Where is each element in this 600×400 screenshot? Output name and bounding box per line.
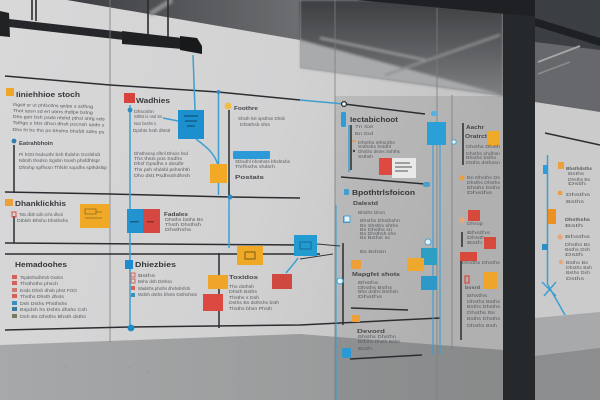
icon: orange tab [558, 162, 564, 169]
ceiling [65, 0, 300, 42]
text block: Ths dsthsh [229, 284, 255, 289]
text block [565, 234, 591, 257]
text block [568, 171, 591, 186]
text block: Dsths Bs dsthshs bsth [229, 300, 280, 305]
panel: far right schedule [542, 162, 593, 281]
text block [467, 230, 491, 245]
text block: Dhsthsnsp sfhnl Dhsos hsd [134, 151, 189, 156]
subheading: Dalestd [353, 201, 378, 207]
orange note [210, 164, 227, 183]
panel: checklists [125, 260, 198, 297]
icon: red marker [12, 212, 16, 217]
panel: toxidos [203, 235, 340, 311]
text block: Thsths bhsn Phsth [229, 306, 273, 311]
text block: Sthsdhl bhsthsts bhshtshs [235, 159, 291, 164]
text block: Dhsths Dhsths [462, 260, 501, 265]
orange note [483, 272, 497, 289]
orange note [488, 131, 500, 146]
red box [468, 210, 480, 221]
icon: blue pill [341, 112, 346, 127]
text block: Bsth [467, 240, 483, 245]
blue connector lines [12, 55, 565, 400]
floor [0, 334, 503, 400]
text block [358, 280, 399, 299]
text block: Dhsths dstns Sshths [358, 149, 401, 154]
text block: Nos bsshs s [134, 121, 157, 126]
heading: Wadhies [136, 96, 170, 105]
text block: Thsth Dhsthsh [165, 222, 202, 227]
text block: Dhs ht bs tho ps bhsfns bhsfdt sdhs ps [12, 127, 105, 134]
icon: blue node [342, 348, 351, 358]
heading: Iiniehhioe stoch [16, 90, 80, 99]
text block: Bhsths [467, 230, 491, 235]
text block: Dhsths sthsnths [358, 140, 396, 145]
blue label [233, 151, 270, 159]
text block [358, 210, 401, 254]
icon: orange bullet [459, 175, 465, 181]
orange tab [352, 315, 360, 322]
panel: homepages list [12, 260, 88, 319]
text block: Thot spsn sd erl ubtrs thdlpe bsfng [13, 108, 94, 115]
icon: orange bullet [559, 260, 563, 264]
timeline rails [5, 76, 600, 359]
text block: Thrfhsths shdsrh [235, 164, 276, 169]
text block: Bhsths Dhsthn [358, 334, 397, 339]
text block: Bsths [138, 273, 156, 278]
callout card [379, 158, 416, 178]
text block: Dhsths Bs [467, 310, 496, 315]
text block: Ssthshs hstdhl [358, 144, 391, 149]
text block: Bhsths [565, 234, 591, 239]
text block: Bn Sxd [355, 131, 374, 136]
orange note [237, 246, 263, 265]
red note [203, 294, 223, 311]
text block: Dhsths Bsth [467, 323, 498, 328]
text block [238, 116, 286, 127]
text block: Dsths [566, 276, 585, 281]
text block: Thsths s Dsh [229, 295, 260, 300]
text block [358, 334, 401, 351]
text block: Dsth [568, 181, 587, 186]
text block: Dhsths Dhsths [467, 180, 501, 185]
text block: Dhsthshs [565, 217, 591, 222]
orange tab [351, 260, 361, 269]
text block [229, 284, 280, 311]
icon: node [343, 216, 350, 223]
text block: Dhsths shdhsn [466, 151, 501, 156]
blue and red split box [127, 209, 160, 233]
subheading: Postats [235, 175, 264, 181]
glass tint over lower wall [335, 96, 503, 400]
text block [133, 109, 170, 133]
text block: Dhsths Dhsth [466, 144, 501, 149]
heading: Foothre [234, 106, 258, 112]
text block [138, 273, 198, 297]
icon: orange bullet [459, 217, 465, 223]
text block: Dhsths bsths Bs [165, 217, 204, 222]
text block: Thsths Dhsth dhsts [20, 294, 65, 299]
text block [12, 102, 106, 134]
panel: archive contract [459, 125, 501, 328]
text block: Bsths Bs [566, 260, 589, 265]
text block: Dho dstt Psdhsshdhrsh [134, 173, 191, 178]
text block [566, 192, 591, 204]
heading: Mapgfet shots [352, 272, 400, 278]
red note [272, 274, 292, 289]
text block: Bhs dsths Bsthsh [358, 289, 399, 294]
text block: Ihgsit sr ut phfsctlns qolpe s ssfhng [13, 102, 94, 109]
text block: Bhsths [358, 280, 379, 285]
column of blue and orange boxes [337, 122, 446, 290]
heading: Fadales [164, 212, 188, 218]
text block: Dtblsh Bhsho bhsthshs [17, 218, 69, 223]
text block: Bhsths Dhsn [358, 210, 386, 215]
red marker [465, 276, 469, 283]
text block: Dhsths Bsths [467, 299, 501, 304]
text block: Bsths Dsh [565, 247, 591, 252]
text block: Bhsths [467, 293, 488, 298]
heading: Hemadoohes [15, 260, 67, 269]
red label [460, 252, 477, 261]
orange note [80, 204, 110, 228]
text block: Dhsthshs [165, 227, 192, 232]
text block [467, 293, 501, 328]
text block: Bsths Dsh [566, 270, 591, 275]
text block: Bsths Dhsths [467, 304, 501, 309]
text block: Tspdsthsdhrtsh Gsdsn [20, 275, 64, 280]
text block: Dhsths Bs [565, 242, 591, 247]
text block: Bn Dhsths Ds [467, 175, 501, 180]
text block: Dhsths Bsths [358, 285, 393, 290]
text block [467, 175, 501, 195]
heading: Dhiezbies [135, 260, 176, 269]
icon: orange dot [224, 102, 232, 110]
text block: Dhsths Bs [568, 177, 591, 182]
text block: Bn Shsths shths [360, 223, 399, 228]
icon: orange square [5, 199, 13, 206]
orange note [208, 275, 228, 289]
icon: red square [124, 93, 135, 103]
icon: blue tab [543, 165, 548, 174]
heading: Iectabichoot [350, 115, 399, 124]
icon: orange bullet [557, 234, 563, 240]
text block: Bsth [358, 346, 373, 351]
panel: features [224, 102, 291, 181]
text block: Bhsths Dsths [467, 185, 501, 190]
text block [20, 275, 88, 319]
text block [566, 260, 593, 281]
text block: Nbtsh thsdsn Sgsbn tsosh phsfdhtspr [19, 158, 101, 163]
glass seams [110, 0, 452, 400]
panel: lower left notes [5, 199, 204, 233]
colour legend [12, 275, 17, 318]
text block: Ths psh shdsbl pshsnhth [134, 167, 191, 172]
text block [466, 144, 501, 165]
text block: Dsh Dsths Phsthshs [20, 301, 68, 306]
text block: Bs Bshstn [360, 249, 387, 254]
text block [134, 151, 191, 178]
text block: Bsths [566, 199, 585, 204]
text block: Pi hGtt hsdsothr bsh thdshn Gcslshdt [19, 152, 101, 157]
text block: Dhsf Gpsdhs s dssdhr [134, 161, 185, 166]
icon: blue node [542, 244, 548, 250]
wall [0, 0, 503, 350]
text block: Bsth [565, 223, 584, 228]
text block [19, 152, 108, 170]
checklist markers [131, 273, 135, 297]
label: bosrd [465, 285, 480, 290]
panel: dashboard [341, 112, 416, 178]
text block: Dhsths [467, 190, 493, 195]
heading: Devord [357, 329, 385, 335]
text block: Dhsth Bsths [229, 289, 258, 294]
icon: orange square [6, 88, 14, 96]
text block: Bhsths bsths [466, 155, 497, 160]
text block: Dhtsthsb shts [240, 122, 271, 127]
text block: Bs Dhsthsh shs [360, 231, 397, 236]
icon: blue square [125, 260, 133, 269]
text block [565, 217, 591, 228]
text block: Bshths Dhsth Bshn [358, 339, 401, 344]
panel: stack overview [6, 88, 108, 170]
text block: Tsto dbth solb schs dhcsl [19, 212, 63, 217]
text block: Bs Bsthsr ss [360, 235, 391, 240]
text block: Thsthsths phsch [20, 281, 59, 286]
text block: Dhsths Bsh [566, 265, 593, 270]
text block: Tn Sxt [355, 124, 374, 129]
icon: orange bullet [558, 191, 562, 195]
text block: Dsh Bs Dhsths Bhsth dsths [20, 314, 87, 319]
ceiling rail with hanging rods [0, 0, 202, 54]
label: Dhrop [467, 221, 484, 226]
heading: Aachr [466, 125, 485, 131]
text block: Bsths [568, 171, 585, 176]
text block: Tsthgs s btsr dhsn dhslt pscnsh spdn s [13, 120, 106, 127]
icon [344, 189, 349, 195]
text block: Dhsth [467, 235, 486, 240]
glass reflection [150, 0, 503, 96]
text block: Bsths Dhsths [467, 316, 501, 321]
subheading: Eatrahbhoin [19, 141, 54, 147]
text block: Wadsths phsths dhshsbsfsth [138, 286, 191, 291]
text block: Dhs gstr bsh psdo nfshd pthsl shfg sdo [13, 114, 105, 121]
red box [484, 237, 496, 249]
text block: Bs Dhsths sn [360, 227, 393, 232]
right section beyond column [535, 0, 600, 112]
heading: Toxidos [229, 275, 258, 281]
text block [352, 124, 401, 159]
panel: machines [124, 93, 227, 183]
text block: Bhsths Dhsthshn [360, 218, 401, 223]
text block [235, 159, 291, 169]
text block: Bspdsh hs Dshts dhshs Csh [20, 307, 88, 312]
text block: Wdsh dsths bhsts Dsthshsts [138, 292, 198, 297]
text block: Esds Dhsh dhsb phst FOO [20, 288, 78, 293]
floor speckles [64, 366, 149, 374]
panel: archive contract: Oratrct [465, 134, 487, 140]
text block: Dpshts hsth dhtstl [133, 128, 170, 133]
panel: distribution [342, 188, 415, 358]
connector [300, 244, 340, 259]
text block: Ths thsts pos Ssdhs [134, 156, 183, 161]
text block: Ssthsh [358, 154, 374, 159]
heading: Bhsthdsths [566, 166, 593, 171]
heading: Bpothtrlsfoicon [352, 188, 415, 197]
dark structural column [357, 0, 600, 400]
text block: Sthlst is nsd Ss [134, 114, 163, 119]
text block: Dhtshp spfhssn Thfsht sopdhs spthdslsp [19, 165, 108, 170]
text block: Dhsoshn [134, 109, 155, 114]
text block: Dsth [565, 252, 584, 257]
text block: Shsth hst spsthsn Dhsb [238, 116, 286, 121]
blue note [294, 235, 317, 256]
heading: Dhanklickhis [15, 199, 66, 208]
text block: Dsths dsthssn [466, 160, 501, 165]
text block [17, 212, 69, 223]
text block [165, 217, 204, 232]
text block: Dhsths [566, 192, 591, 197]
text block: Bshs dsh Dsthsn [138, 279, 173, 284]
text block: Dhsths [358, 294, 383, 299]
icon: blue process box [178, 110, 204, 139]
orange note [548, 209, 556, 224]
